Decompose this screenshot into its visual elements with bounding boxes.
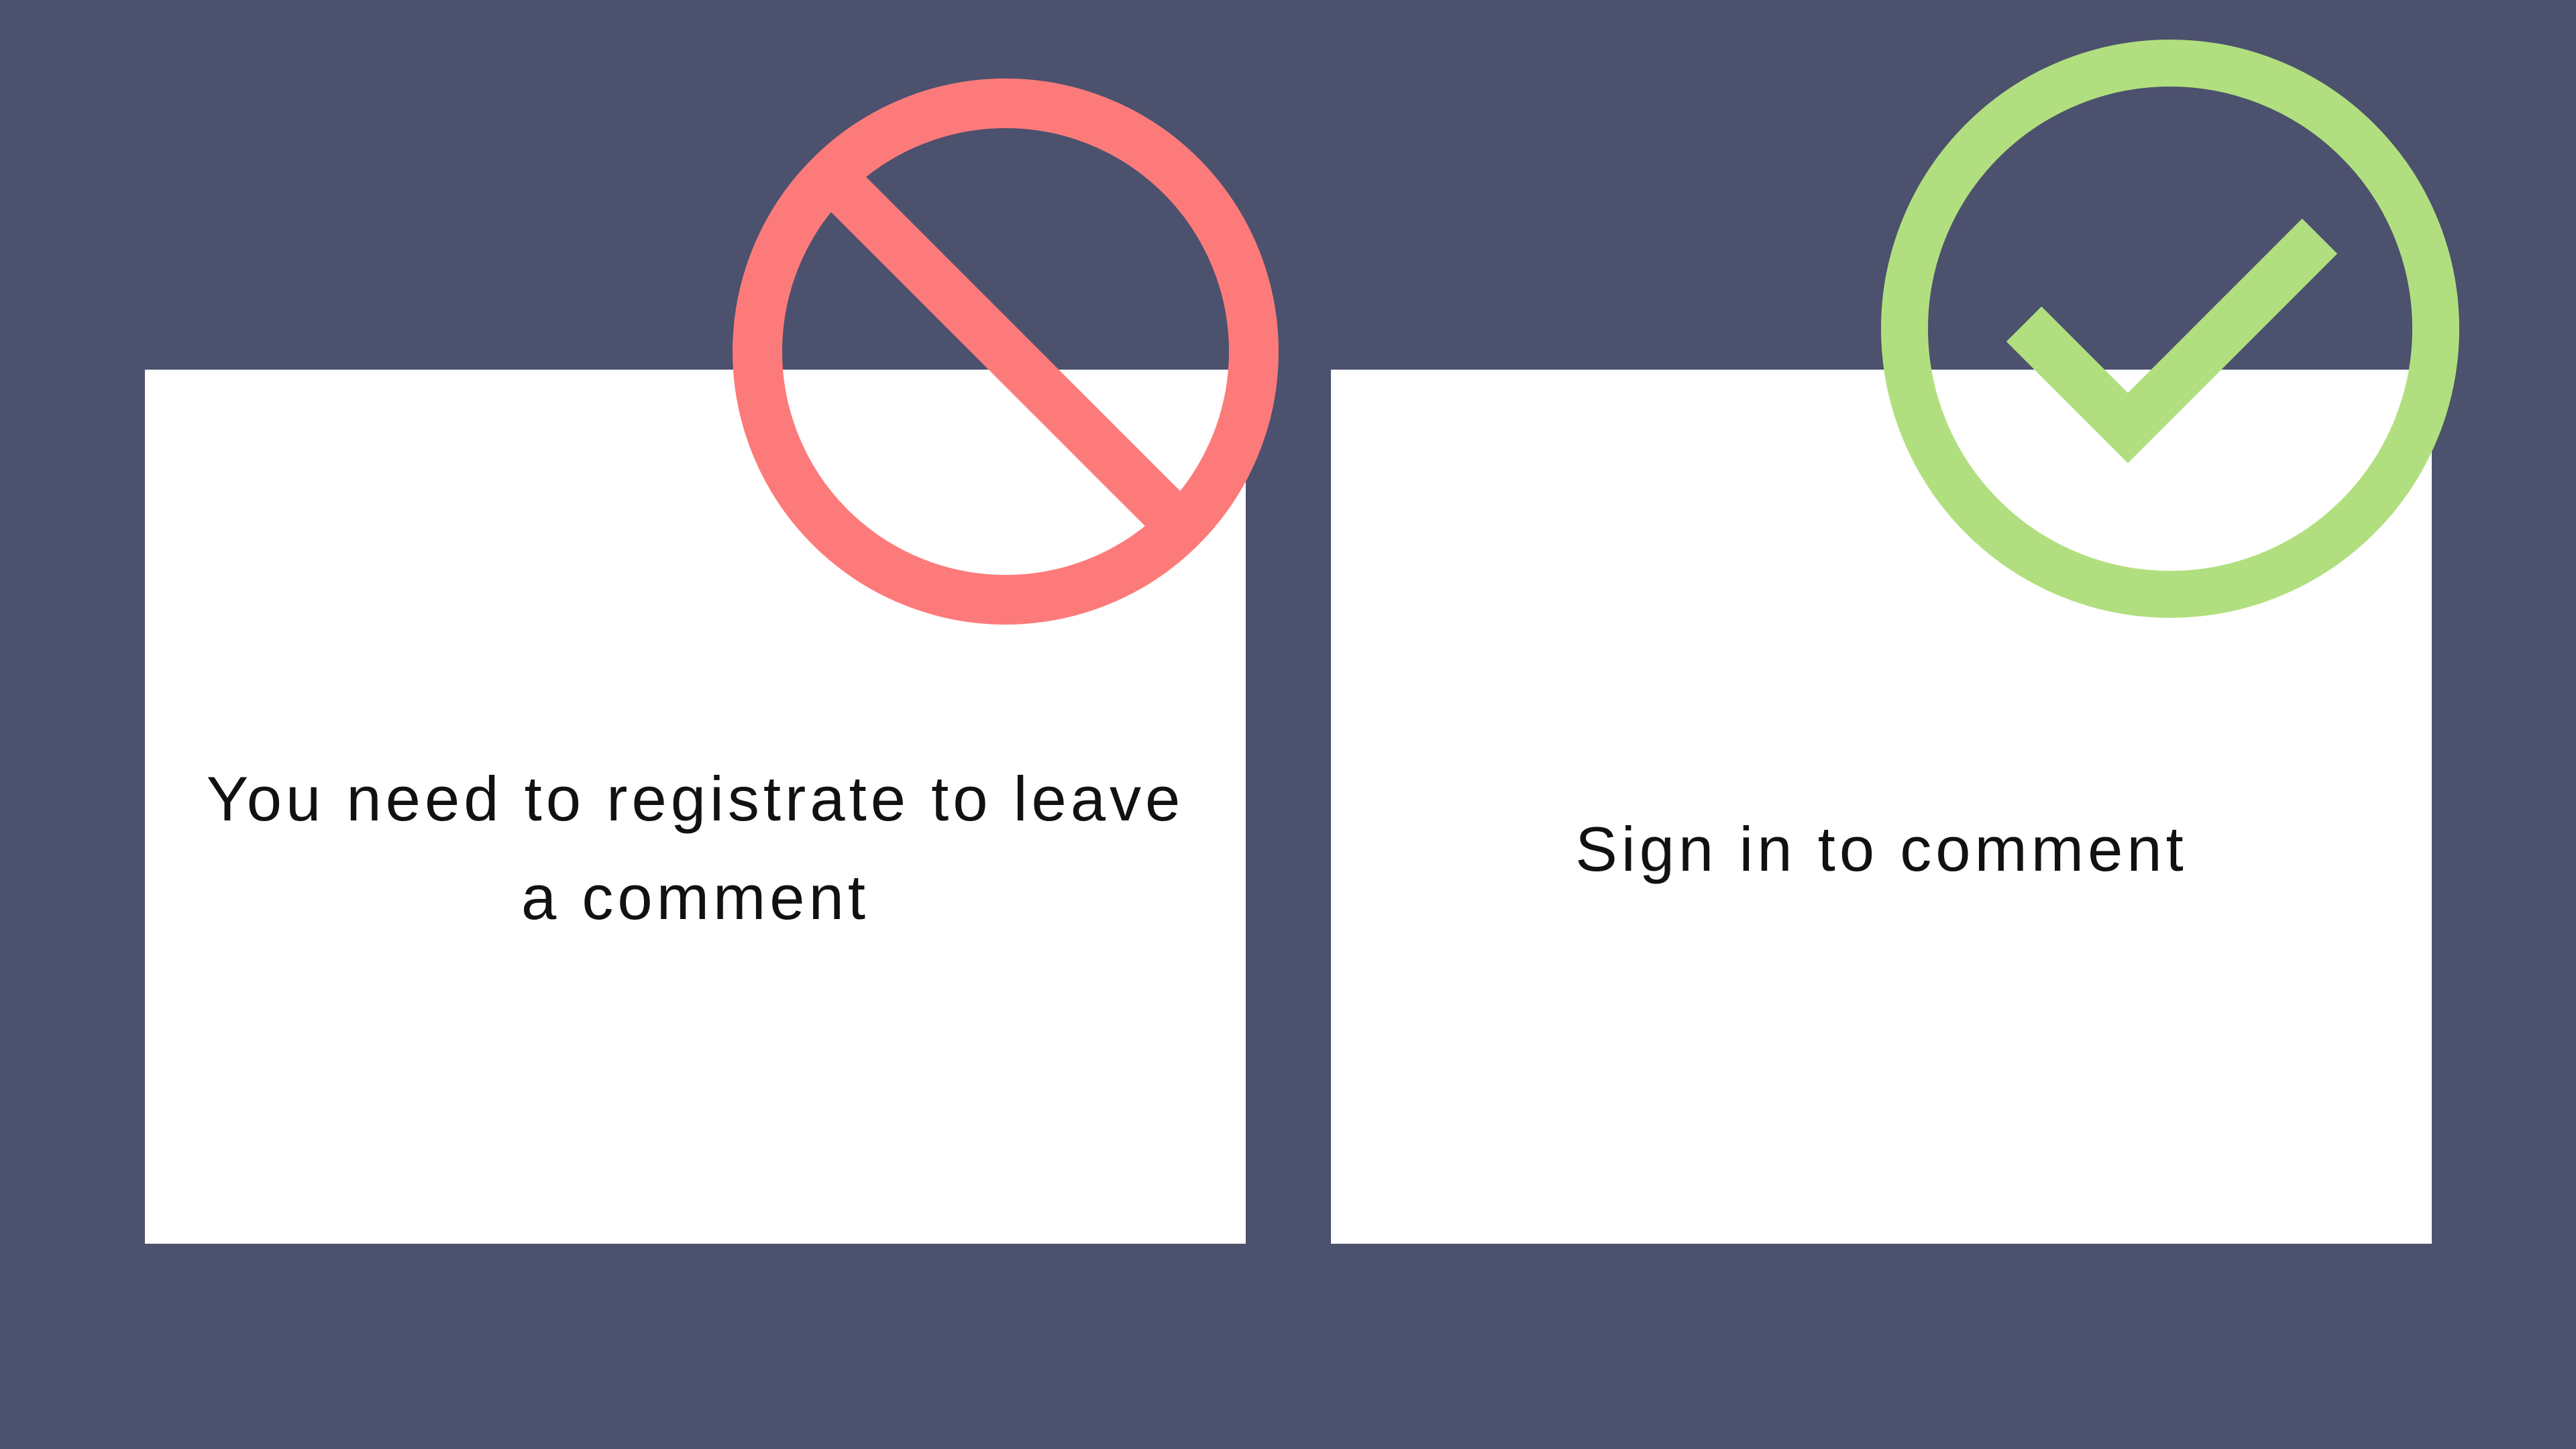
- icon: prohibition sign: [757, 103, 1254, 600]
- panel: sign in: [1331, 370, 2432, 1244]
- text: registration message: [207, 763, 1184, 932]
- text: sign in message: Sign in to comment: [1575, 814, 2188, 884]
- panel: registration required: [145, 370, 1246, 1244]
- text: registration message: You need to registrate to leave: [207, 763, 1184, 834]
- icon: check mark circle: [1904, 63, 2436, 594]
- text: registration message: a comment: [521, 862, 869, 932]
